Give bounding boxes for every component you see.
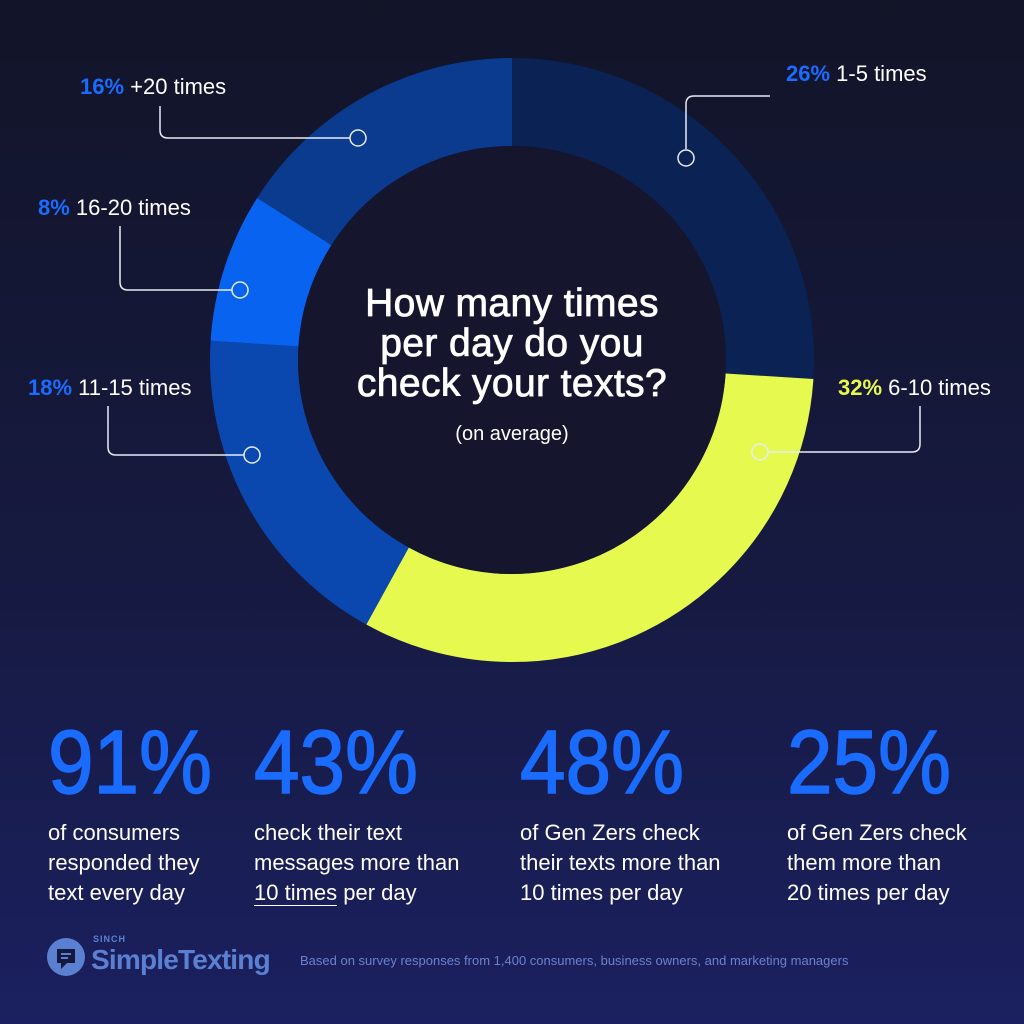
logo: SINCH [93, 934, 126, 944]
logo: SimpleTexting [91, 944, 270, 975]
stat 48%: 10 times per day [520, 880, 683, 905]
logo [47, 934, 270, 976]
label 32%: 32% 6-10 times [838, 375, 991, 400]
stat 43%: check their text [254, 820, 402, 845]
title [357, 282, 667, 445]
stat 91% [48, 713, 212, 905]
stat 48%: 48% [520, 713, 684, 813]
footnote: Based on survey responses from 1,400 consumers, business owners, and marketing managers [300, 953, 848, 968]
label 16%: 16% +20 times [80, 74, 226, 99]
stat 91%: of consumers [48, 820, 180, 845]
stat 25%: of Gen Zers check [787, 820, 967, 845]
stat 48%: their texts more than [520, 850, 721, 875]
stat 43%: 10 times per day [254, 880, 417, 905]
label 18%: 18% 11-15 times [28, 375, 191, 400]
title: per day do you [380, 322, 644, 365]
stat 48% [520, 713, 721, 905]
title: (on average) [455, 423, 569, 445]
stat 43%: 43% [254, 713, 418, 813]
stat 25%: 20 times per day [787, 880, 950, 905]
stat 25%: 25% [787, 713, 951, 813]
donut chart [107, 58, 921, 662]
stat 43%: messages more than [254, 850, 459, 875]
title: check your texts? [357, 362, 667, 405]
label 8%: 8% 16-20 times [38, 195, 191, 220]
stat 25% [787, 713, 967, 905]
stat 91%: responded they [48, 850, 200, 875]
stat 25%: them more than [787, 850, 941, 875]
stat 43% [254, 713, 459, 906]
title: How many times [365, 282, 659, 325]
stat 91%: text every day [48, 880, 185, 905]
label 26%: 26% 1-5 times [786, 61, 927, 86]
stat 91%: 91% [48, 713, 212, 813]
stat 48%: of Gen Zers check [520, 820, 700, 845]
